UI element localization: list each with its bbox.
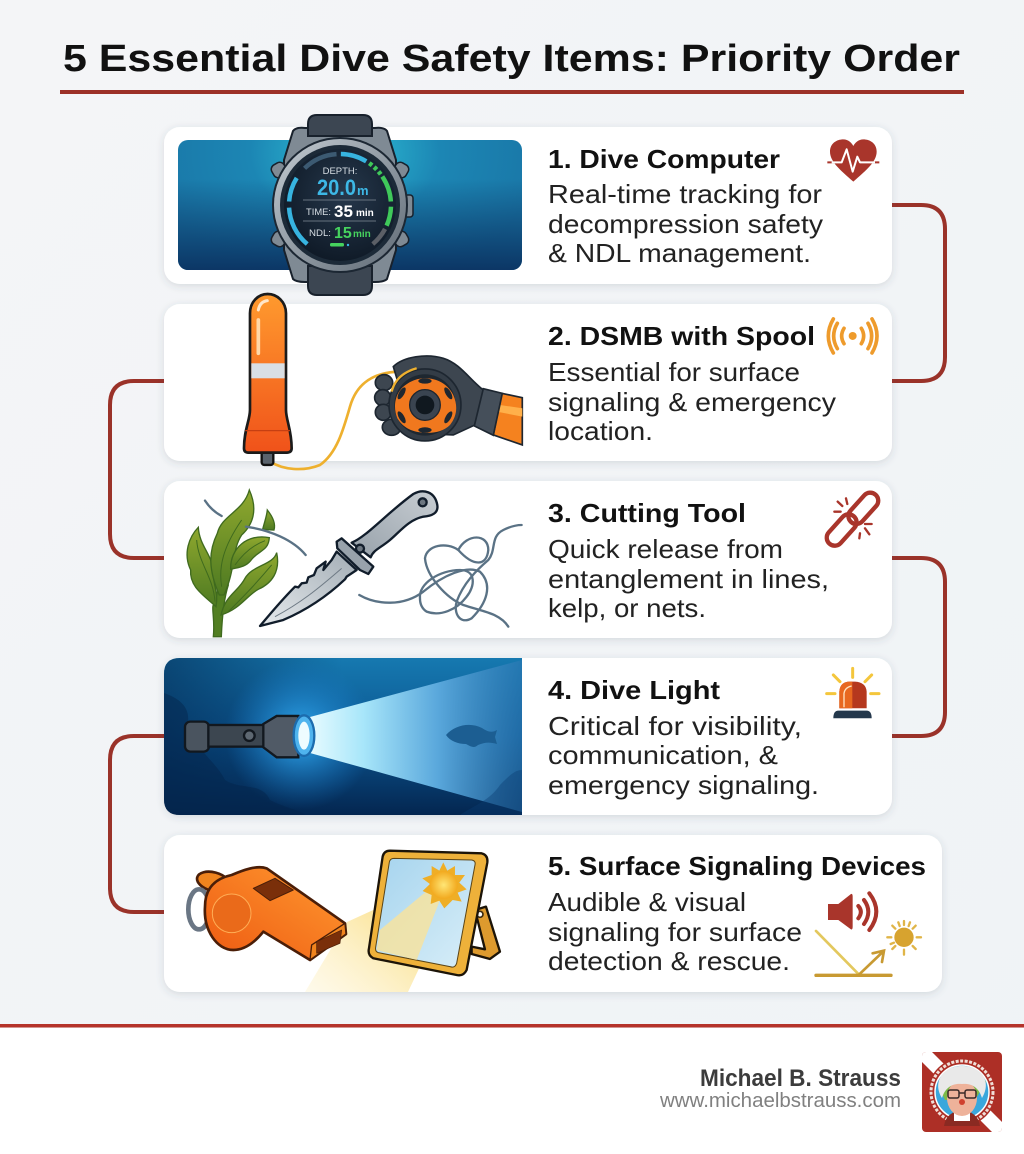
text: dive light description: Critical for visibility, (548, 711, 802, 741)
image: underwater flashlight scene (164, 658, 522, 815)
panel: surface signaling devices (164, 835, 942, 992)
heading: DSMB with spool: 2. DSMB with Spool (548, 321, 815, 351)
fish silhouette (446, 725, 497, 747)
beam of light (310, 660, 522, 812)
text: dive computer description (548, 179, 823, 268)
icon: dive watch: m (357, 183, 369, 198)
icon: heart with ECG (827, 139, 879, 182)
text: surface signaling description: detection & rescue. (548, 946, 790, 976)
icon: dive watch: min (356, 208, 374, 219)
icon: DSMB and spool illustration (244, 294, 522, 469)
icon: dive knife (260, 491, 437, 626)
text: dive light description: emergency signaling. (548, 770, 819, 800)
icon: signal waves (828, 319, 877, 353)
card 3 background (164, 481, 892, 638)
text: DSMB description: signaling & emergency (548, 387, 836, 417)
heading: cutting tool: 3. Cutting Tool (548, 498, 746, 528)
icon: dive watch: min (353, 229, 371, 240)
card 5 background (164, 835, 942, 992)
text: dive computer description: & NDL management. (548, 238, 811, 268)
panel: dive computer (164, 115, 892, 295)
text: DSMB description: location. (548, 416, 653, 446)
text: DSMB description (548, 357, 836, 446)
image background (178, 140, 522, 270)
logo: author avatar (922, 1052, 1002, 1132)
icon: kelp (187, 490, 278, 637)
panel: dive light (164, 658, 892, 815)
card 2 background (164, 304, 892, 461)
website: www.michaelbstrauss.com (659, 1090, 901, 1112)
heading: dive light: 4. Dive Light (548, 675, 720, 705)
author name: Michael B. Strauss (700, 1065, 901, 1092)
heading: surface signaling devices: 5. Surface Signaling Devices (548, 851, 926, 881)
text: cutting tool description: entanglement in lines, (548, 564, 829, 594)
text: dive computer description: Real-time tracking for (548, 179, 822, 209)
title (60, 38, 964, 94)
text: surface signaling description (548, 887, 802, 976)
text: dive light description (548, 711, 819, 800)
text: cutting tool description: kelp, or nets. (548, 593, 706, 623)
icon: dive watch: TIME: (306, 207, 331, 218)
icon: flashlight (185, 715, 314, 757)
icon: broken chain link (823, 489, 882, 549)
icon: emergency beacon (827, 668, 879, 718)
card 1 background (164, 127, 892, 284)
text: dive light description: communication, & (548, 740, 778, 770)
panel: DSMB with spool (164, 294, 892, 469)
footer (0, 1024, 1024, 1154)
text: surface signaling description: signaling for surface (548, 917, 802, 947)
card 4 background (164, 658, 892, 815)
panel: cutting tool (164, 481, 892, 638)
heading: dive computer: 1. Dive Computer (548, 144, 780, 174)
icon: sun reflection (816, 921, 921, 975)
icon: dive watch: DEPTH: (323, 166, 357, 177)
icon: whistle (188, 867, 346, 960)
text: cutting tool description (548, 534, 829, 623)
title: 5 Essential Dive Safety Items: Priority Order (63, 38, 960, 80)
icon: dive watch (269, 115, 413, 295)
icon: tangled line (205, 501, 522, 627)
icon: signal mirror (369, 851, 500, 975)
icon: dive watch: 20.0 (317, 175, 356, 200)
text: surface signaling description: Audible & visual (548, 887, 746, 917)
icon: speaker (828, 893, 876, 930)
connectors between cards (110, 205, 945, 912)
text: cutting tool description: Quick release from (548, 534, 783, 564)
seabed silhouettes (164, 693, 276, 815)
text: DSMB description: Essential for surface (548, 357, 800, 387)
icon: dive watch: NDL: (309, 228, 331, 239)
icon: dive watch: 15 (334, 225, 352, 242)
text: dive computer description: decompression safety (548, 209, 823, 239)
icon: dive watch: 35 (334, 202, 353, 221)
icon: reflected sunbeam (305, 910, 419, 992)
